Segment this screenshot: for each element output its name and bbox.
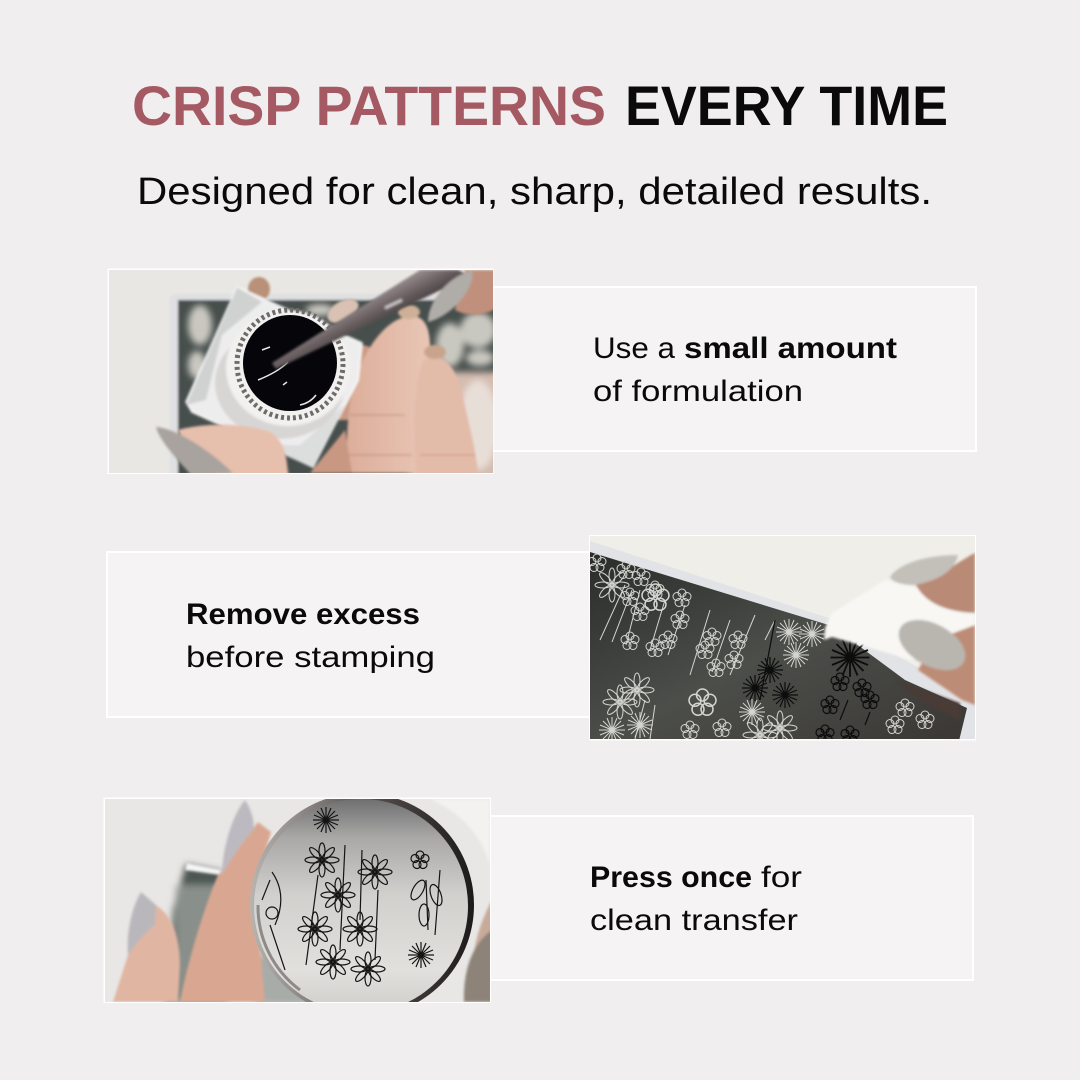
glitter nails (890, 555, 958, 585)
photo: wiping plate with cotton pad (588, 535, 976, 752)
ring finger (414, 356, 478, 473)
step 3 text (590, 861, 802, 937)
plate engravings (588, 554, 934, 752)
back container (437, 800, 489, 856)
step 3 text: for (761, 861, 802, 894)
panel: step 2 text card (107, 552, 593, 717)
right fingers (470, 895, 495, 1002)
panel: step 1 text card (490, 287, 976, 451)
photo: jar of stamping gel with brush (108, 268, 500, 484)
panel: step 3 text card (487, 816, 973, 980)
cotton pad (824, 580, 975, 660)
title: EVERY TIME (625, 74, 948, 137)
middle finger (347, 316, 430, 473)
stamper rim and lens (250, 793, 474, 1017)
glass jar (186, 287, 362, 467)
step 1 text: Use a (593, 332, 676, 365)
step 1 text (593, 332, 897, 408)
title (132, 74, 948, 137)
title: CRISP PATTERNS (132, 74, 606, 137)
subtitle: Designed for clean, sharp, detailed results. (137, 171, 932, 213)
step 1 text: small amount (684, 332, 897, 365)
fingers (915, 553, 975, 613)
nails (128, 892, 156, 955)
fingers (113, 905, 180, 1002)
back fingertips (248, 277, 270, 301)
photo: clear stamper with transferred pattern (104, 793, 495, 1017)
black gel (243, 315, 337, 411)
step 2 text: Remove excess (186, 598, 420, 631)
step 2 text (186, 598, 435, 674)
step 2 text: before stamping (186, 641, 435, 674)
step 3 text: Press once (590, 861, 752, 894)
brush (272, 270, 470, 369)
thumb (178, 425, 290, 480)
top right finger with nail (455, 270, 500, 315)
step 1 text: of formulation (593, 375, 803, 408)
step 3 text: clean transfer (590, 904, 798, 937)
transferred flower pattern (262, 807, 444, 986)
